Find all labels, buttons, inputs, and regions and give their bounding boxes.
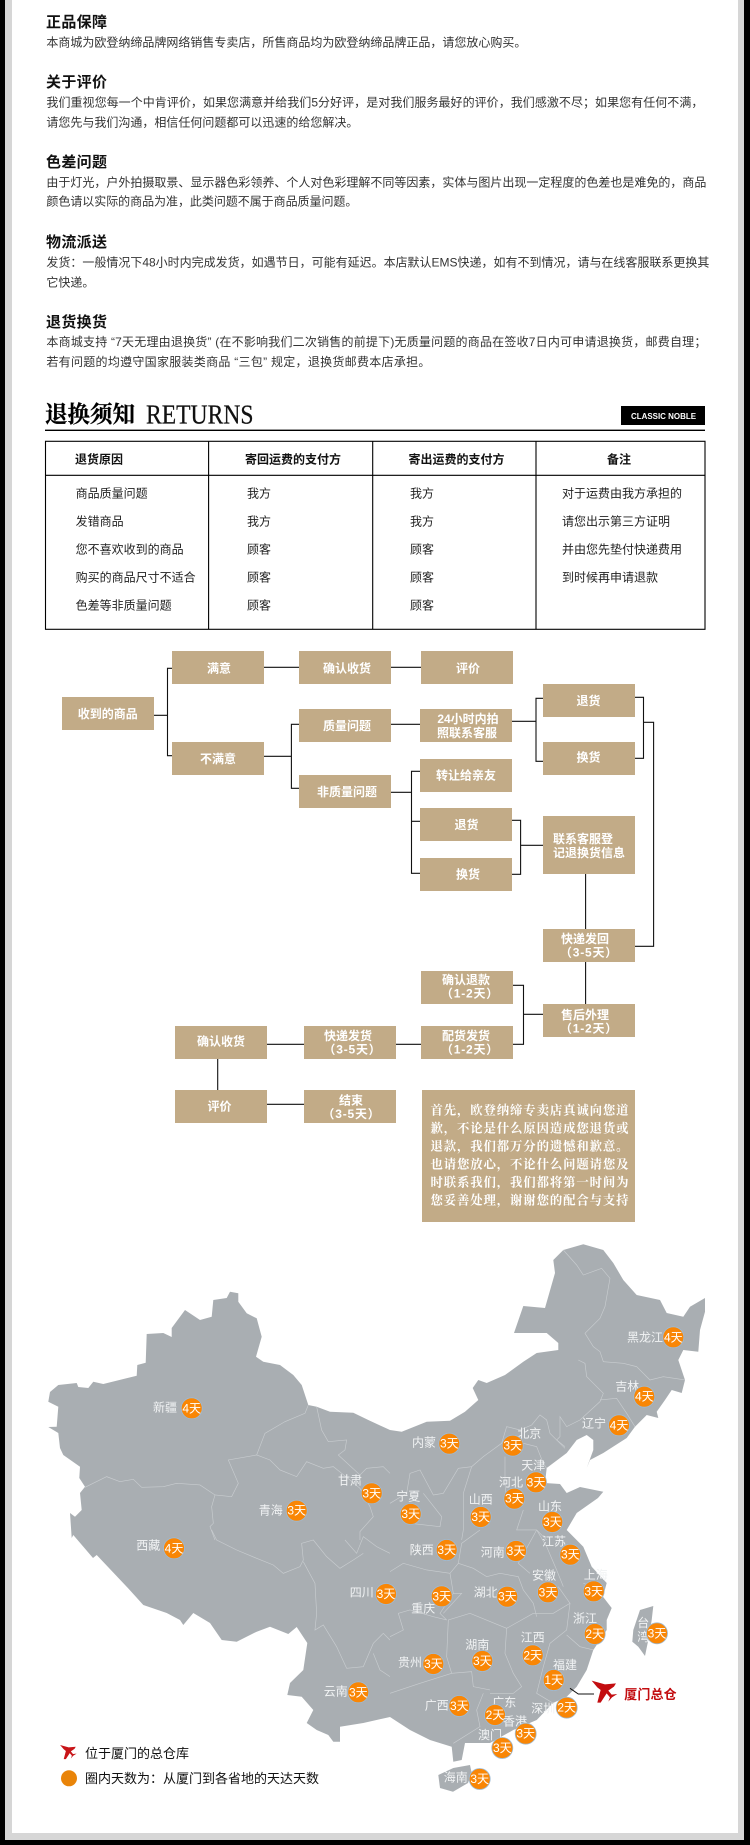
column: return reason: 商品质量问题 xyxy=(76,485,148,500)
box: 24小时内拍照联系客服: 24小时内拍 xyxy=(437,711,499,726)
column: return reason: 您不喜欢收到的商品 xyxy=(76,541,184,556)
marker: 青海: 3天 xyxy=(287,1504,306,1518)
box: 联系客服登记退换货信息: 联系客服登 xyxy=(553,831,613,846)
box: 配货发货: （1-2天） xyxy=(441,1043,499,1057)
heading: 退货换货: 退货换货 xyxy=(46,313,107,331)
box: 换货: 换货 xyxy=(456,867,480,882)
marker: 甘肃: 甘肃 xyxy=(338,1474,362,1488)
box: 确认收货: 确认收货 xyxy=(197,1034,245,1049)
box: 确认收货 xyxy=(299,651,391,684)
marker: 河北: 河北 xyxy=(499,1475,523,1489)
box: 确认收货: 确认收货 xyxy=(323,660,371,675)
column: outbound shipping payer: 顾客 xyxy=(410,569,434,584)
box: 评价 xyxy=(421,651,513,684)
marker: 深圳: 2天 xyxy=(557,1701,576,1715)
box: 退货 xyxy=(543,684,635,717)
marker: 香港: 3天 xyxy=(516,1727,535,1741)
box: 确认退款: （1-2天） xyxy=(441,987,499,1001)
column: return shipping payer: 顾客 xyxy=(247,597,271,612)
marker: 辽宁: 4天 xyxy=(610,1418,628,1432)
marker: 海南 xyxy=(444,1768,490,1790)
box: 结束: 结束 xyxy=(339,1092,363,1107)
marker: 澳门: 3天 xyxy=(493,1741,512,1755)
marker: 宁夏: 3天 xyxy=(401,1507,420,1521)
callout: apology message: 您妥善处理，谢谢您的配合与支持 xyxy=(430,1193,629,1208)
heading: returns title: RETURNS xyxy=(146,400,254,430)
marker: 河南: 河南 xyxy=(481,1544,505,1559)
box: 质量问题 xyxy=(299,709,391,742)
column: return reason xyxy=(76,485,196,612)
box: 售后外理 xyxy=(543,1004,635,1037)
marker: 广东: 2天 xyxy=(486,1708,504,1722)
legend xyxy=(60,1745,319,1786)
box: 转让给亲友 xyxy=(420,759,512,792)
marker: 浙江: 浙江 xyxy=(573,1611,597,1625)
marker: 浙江 xyxy=(573,1611,605,1644)
marker: 北京 xyxy=(502,1426,541,1456)
marker: 宁夏: 宁夏 xyxy=(396,1489,420,1504)
marker: 西藏: 西藏 xyxy=(136,1539,160,1553)
box: 质量问题: 质量问题 xyxy=(323,718,371,733)
marker: 四川: 四川 xyxy=(350,1585,374,1599)
map outline: Taiwan xyxy=(632,1606,653,1656)
heading: returns title: 退换须知 xyxy=(45,401,135,427)
callout: Xiamen warehouse: 厦门总仓 xyxy=(624,1687,677,1702)
marker: 江西 xyxy=(521,1631,545,1666)
marker: 浙江: 2天 xyxy=(585,1627,604,1641)
column: outbound shipping payer: 我方 xyxy=(410,513,434,528)
marker: 澳门 xyxy=(478,1727,513,1758)
icon: legend circle xyxy=(61,1770,77,1786)
returns table xyxy=(46,441,705,629)
marker: 贵州: 3天 xyxy=(424,1657,443,1671)
marker: 广东 xyxy=(484,1695,516,1726)
icon: legend plane xyxy=(60,1745,77,1759)
box: 评价 xyxy=(175,1090,267,1123)
marker: 宁夏 xyxy=(396,1489,421,1524)
text block: 正品保障: 本商城为欧登纳缔品牌网络销售专卖店，所售商品均为欧登纳缔品牌正品，请您放心购买。 xyxy=(46,34,526,49)
column: remarks: 到时候再申请退款 xyxy=(562,570,658,584)
box: 换货 xyxy=(420,858,512,891)
marker: 甘肃 xyxy=(338,1474,382,1504)
marker: 湖北 xyxy=(474,1584,518,1607)
marker: 深圳 xyxy=(531,1697,577,1718)
marker: 贵州: 贵州 xyxy=(398,1656,422,1670)
marker: 河北 xyxy=(499,1475,525,1509)
marker: 广西: 3天 xyxy=(450,1699,469,1713)
text block: 物流派送: 发货：一般情况下48小时内完成发货，如遇节日，可能有延迟。本店默认EMS快递，如有不到情况，请与在线客服联系更换其 xyxy=(46,254,709,269)
text block: 色差问题: 由于灯光，户外拍摄取景、显示器色彩领养、个人对色彩理解不同等因素，实体与图片出现一定程度的色差也是难免的，商品 xyxy=(46,174,706,189)
box: 24小时内拍照联系客服: 照联系客服 xyxy=(437,725,497,740)
marker: 湖南: 3天 xyxy=(473,1654,492,1668)
column: return reason: 发错商品 xyxy=(76,513,124,528)
box: 配货发货 xyxy=(421,1026,513,1059)
marker: 吉林 xyxy=(615,1380,655,1407)
column: remarks: 并由您先垫付快递费用 xyxy=(562,541,682,556)
marker: 重庆: 3天 xyxy=(432,1589,451,1603)
marker: 广西: 广西 xyxy=(425,1699,449,1713)
marker: 山西 xyxy=(469,1492,493,1528)
marker: 重庆 xyxy=(411,1586,452,1615)
marker: 新疆: 新疆 xyxy=(153,1400,177,1415)
flowchart xyxy=(62,651,654,1222)
marker: 吉林: 4天 xyxy=(635,1390,654,1404)
box: 快递发货: 快递发货 xyxy=(324,1028,372,1043)
callout: apology message: 时联系我们，我们都将第一时间为 xyxy=(430,1175,628,1190)
column: outbound shipping payer: 我方 xyxy=(410,485,434,500)
box: 确认退款: 确认退款 xyxy=(442,972,490,987)
marker: 上海 xyxy=(583,1567,608,1602)
marker: 四川 xyxy=(350,1584,396,1604)
marker: 台湾 xyxy=(637,1615,668,1644)
box: 满意: 满意 xyxy=(207,660,231,675)
heading: 色差问题: 色差问题 xyxy=(46,153,107,171)
icon: red plane xyxy=(592,1681,617,1703)
marker: 西藏 xyxy=(136,1538,184,1559)
marker: 重庆: 重庆 xyxy=(411,1601,435,1615)
marker: 云南 xyxy=(324,1682,369,1703)
box: 评价: 评价 xyxy=(207,1100,232,1114)
marker: 湖北: 湖北 xyxy=(474,1584,498,1599)
text block: 物流派送 xyxy=(46,254,709,289)
table header row: 寄回运费的支付方 xyxy=(245,451,341,466)
box: 结束 xyxy=(304,1090,396,1123)
marker: 天津: 天津 xyxy=(521,1458,545,1472)
marker: 甘肃: 3天 xyxy=(362,1486,381,1500)
marker: 河北: 3天 xyxy=(505,1492,524,1506)
callout: apology message: 歉，不论是什么原因造成您退货或 xyxy=(430,1121,629,1136)
marker: 澳门: 澳门 xyxy=(478,1727,502,1742)
marker: 台湾: 湾 xyxy=(637,1629,649,1644)
marker: 辽宁 xyxy=(582,1415,630,1436)
marker: 广西 xyxy=(425,1696,470,1716)
box: 售后外理: （1-2天） xyxy=(560,1022,618,1036)
marker: 四川: 3天 xyxy=(377,1587,395,1601)
heading: 正品保障: 正品保障 xyxy=(46,13,107,31)
map outline: Hainan xyxy=(438,1765,472,1792)
box: 确认退款 xyxy=(421,971,513,1004)
box: 收到的商品: 收到的商品 xyxy=(78,706,138,721)
box: 快递发货: （3-5天） xyxy=(323,1043,382,1057)
marker: 新疆: 4天 xyxy=(182,1401,201,1415)
marker: 深圳: 深圳 xyxy=(531,1701,555,1715)
marker: 香港 xyxy=(503,1715,536,1744)
callout: apology message: 也请您放心，不论什么问题请您及 xyxy=(430,1157,629,1172)
callout: apology message: 首先，欧登纳缔专卖店真诚向您道 xyxy=(430,1103,629,1118)
marker: 陕西 xyxy=(410,1540,457,1560)
marker: 河南 xyxy=(481,1540,526,1562)
column: remarks: 对于运费由我方承担的 xyxy=(562,485,682,500)
marker: 青海 xyxy=(259,1500,307,1521)
column: return shipping payer: 我方 xyxy=(247,485,271,500)
text block: 关于评价 xyxy=(46,94,703,129)
marker: 黑龙江: 4天 xyxy=(664,1330,683,1344)
box: 满意 xyxy=(172,651,264,684)
column: return shipping payer xyxy=(247,485,271,612)
text block: 关于评价: 我们重视您每一个中肯评价，如果您满意并给我们5分好评，是对我们服务最好的评价，我们感激不尽；如果您有任何不满， xyxy=(46,94,703,109)
marker: 江苏 xyxy=(542,1535,581,1565)
marker: 福建: 1天 xyxy=(544,1673,563,1687)
marker: 上海: 上海 xyxy=(584,1567,608,1582)
marker: 福建 xyxy=(543,1657,577,1690)
marker: 贵州 xyxy=(398,1654,444,1674)
column: outbound shipping payer: 顾客 xyxy=(410,541,434,556)
marker: 天津 xyxy=(521,1458,546,1493)
marker: 湖北: 3天 xyxy=(498,1590,517,1604)
column: return shipping payer: 顾客 xyxy=(247,541,271,556)
map: China delivery times xyxy=(48,1244,705,1792)
tag: classic noble: CLASSIC NOBLE xyxy=(631,411,696,421)
marker: 江苏: 江苏 xyxy=(542,1535,566,1549)
marker: 黑龙江 xyxy=(627,1327,684,1348)
callout: apology message xyxy=(422,1090,635,1222)
column: return shipping payer: 顾客 xyxy=(247,569,271,584)
heading: 物流派送: 物流派送 xyxy=(46,233,107,251)
marker: 海南: 海南 xyxy=(444,1770,468,1785)
marker: 黑龙江: 黑龙江 xyxy=(627,1331,663,1345)
box: 联系客服登记退换货信息 xyxy=(543,816,635,874)
marker: 湖南: 湖南 xyxy=(465,1637,489,1652)
box: 快递发货 xyxy=(304,1026,396,1059)
marker: 山西: 山西 xyxy=(469,1492,493,1506)
marker: 吉林: 吉林 xyxy=(615,1380,639,1394)
marker: 河南: 3天 xyxy=(507,1544,525,1558)
box: 退货: 退货 xyxy=(576,693,601,708)
marker: 江苏: 3天 xyxy=(561,1548,580,1562)
marker: 江西: 江西 xyxy=(521,1631,545,1645)
text block: 色差问题: 颜色请以实际的商品为准，此类问题不属于商品质量问题。 xyxy=(46,194,357,209)
box: 快递发回: 快递发回 xyxy=(561,931,609,946)
marker: 山东: 山东 xyxy=(538,1500,562,1514)
marker: 陕西: 3天 xyxy=(437,1543,456,1557)
text block: 退货换货 xyxy=(46,334,706,369)
marker: 湖南 xyxy=(465,1637,493,1672)
marker: 上海: 3天 xyxy=(584,1584,603,1598)
text block: 物流派送: 它快递。 xyxy=(46,274,94,289)
column: return shipping payer: 我方 xyxy=(247,513,271,528)
box: 换货 xyxy=(543,742,635,775)
box: 退货: 退货 xyxy=(454,817,479,832)
text block: 退货换货: 若有问题的均遵守国家服装类商品 “三包” 规定，退换货邮费本店承担。 xyxy=(46,354,430,369)
marker: 香港: 香港 xyxy=(503,1715,527,1729)
box: 转让给亲友: 转让给亲友 xyxy=(436,768,496,783)
box: 非质量问题: 非质量问题 xyxy=(317,784,377,799)
text block: 关于评价: 请您先与我们沟通，相信任何问题都可以迅速的给您解决。 xyxy=(46,114,358,129)
legend text: days: 圈内天数为：从厦门到各省地的天达天数 xyxy=(85,1771,319,1786)
marker: 山东 xyxy=(538,1500,563,1532)
marker: 内蒙 xyxy=(412,1433,460,1454)
table header row xyxy=(75,451,631,466)
box: 换货: 换货 xyxy=(576,750,601,765)
callout: Xiamen warehouse xyxy=(570,1681,677,1703)
marker: 云南: 云南 xyxy=(324,1683,348,1698)
column: return reason: 购买的商品尺寸不适合 xyxy=(76,569,196,584)
box: 评价: 评价 xyxy=(456,661,480,675)
marker: 北京: 北京 xyxy=(517,1426,541,1440)
box: 结束: （3-5天） xyxy=(322,1107,381,1121)
box: 非质量问题 xyxy=(299,775,391,808)
box: 快递发回 xyxy=(543,929,635,962)
marker: 安徽 xyxy=(532,1568,558,1603)
box: 联系客服登记退换货信息: 记退换货信息 xyxy=(553,845,625,860)
box: 24小时内拍照联系客服 xyxy=(420,709,512,742)
marker: 安徽: 3天 xyxy=(539,1585,557,1599)
marker: 新疆 xyxy=(153,1398,202,1419)
column: remarks: 请您出示第三方证明 xyxy=(562,513,670,528)
column: outbound shipping payer xyxy=(410,485,434,612)
panel: policy notes xyxy=(46,13,709,369)
text block: 色差问题 xyxy=(46,174,706,209)
column: outbound shipping payer: 顾客 xyxy=(410,597,434,612)
marker: 安徽: 安徽 xyxy=(532,1568,556,1583)
heading: 关于评价: 关于评价 xyxy=(46,74,107,91)
marker: 台湾: 3天 xyxy=(648,1626,666,1640)
marker: 内蒙: 内蒙 xyxy=(412,1436,436,1450)
marker: 天津: 3天 xyxy=(527,1475,545,1489)
box: 收到的商品 xyxy=(62,697,154,730)
marker: 山西: 3天 xyxy=(471,1510,490,1524)
text block: 退货换货: 本商城支持 “7天无理由退换货” (在不影响我们二次销售的前提下)无质量问题的商品在签收7日内可申请退换货，邮费自理； xyxy=(46,334,706,349)
box: 退货 xyxy=(420,808,512,841)
marker: 福建: 福建 xyxy=(553,1657,577,1672)
marker: 云南: 3天 xyxy=(349,1685,368,1699)
box: 不满意: 不满意 xyxy=(200,751,236,766)
box: 快递发回: （3-5天） xyxy=(560,946,618,960)
table header row: 备注 xyxy=(607,451,631,466)
callout: apology message: 退款，我们都万分的遗憾和歉意。 xyxy=(430,1139,628,1154)
marker: 辽宁: 辽宁 xyxy=(582,1415,606,1430)
legend text: warehouse: 位于厦门的总仓库 xyxy=(85,1746,189,1761)
box: 售后外理: 售后外理 xyxy=(561,1007,609,1022)
heading: returns title xyxy=(45,400,254,430)
box: 不满意 xyxy=(172,742,264,775)
marker: 广东: 广东 xyxy=(492,1695,516,1709)
box: 确认收货 xyxy=(175,1026,267,1059)
marker: 北京: 3天 xyxy=(503,1439,522,1453)
marker: 内蒙: 3天 xyxy=(440,1437,459,1451)
column: return reason: 色差等非质量问题 xyxy=(76,598,172,612)
column: remarks xyxy=(562,485,682,584)
marker: 青海: 青海 xyxy=(259,1503,283,1518)
marker: 陕西: 陕西 xyxy=(410,1542,434,1557)
marker: 海南: 3天 xyxy=(470,1772,489,1786)
box: 配货发货: 配货发货 xyxy=(442,1028,490,1043)
marker: 山东: 3天 xyxy=(543,1515,562,1529)
marker: 江西: 2天 xyxy=(523,1648,542,1662)
tag: classic noble xyxy=(621,406,705,425)
map outline: mainland xyxy=(48,1244,705,1762)
flowchart connectors xyxy=(154,667,654,1104)
marker: 台湾: 台 xyxy=(637,1615,649,1630)
table header row: 退货原因 xyxy=(75,451,123,466)
marker: 西藏: 4天 xyxy=(165,1541,183,1555)
table header row: 寄出运费的支付方 xyxy=(408,451,505,466)
